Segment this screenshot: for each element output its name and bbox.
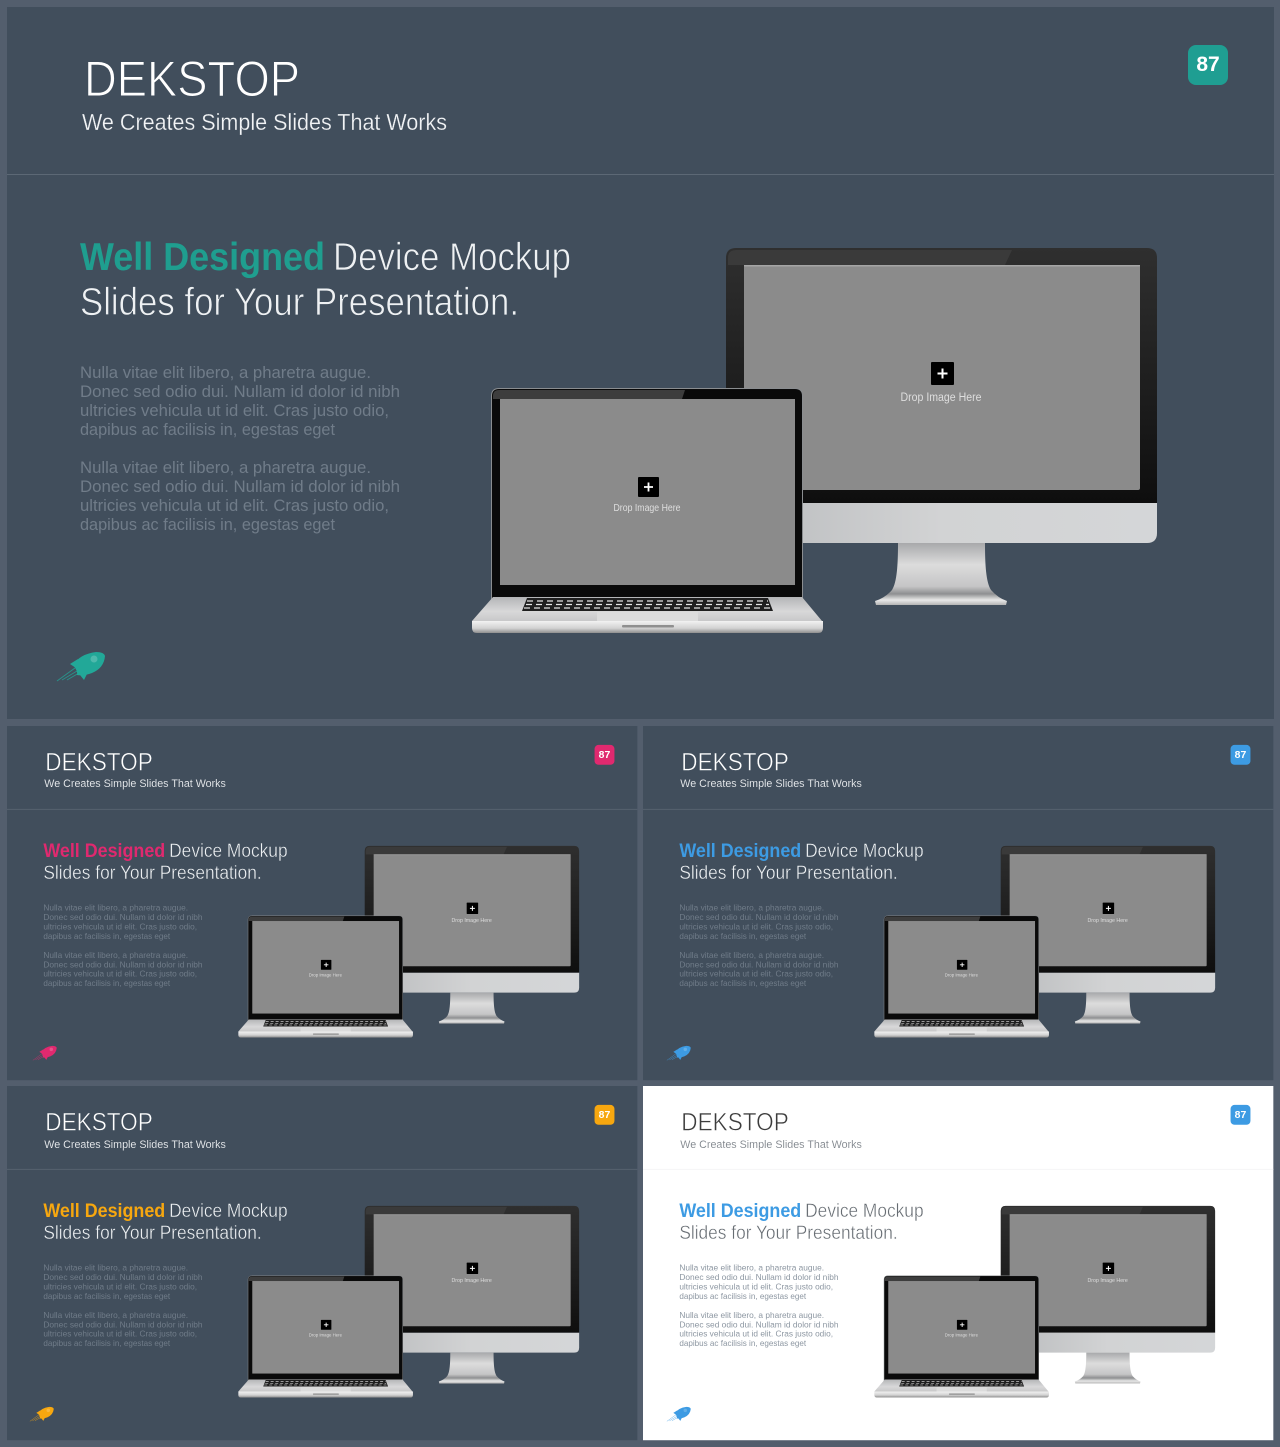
- heading: Well Designed: [679, 840, 801, 862]
- subtitle: We Creates Simple Slides That Works: [680, 1139, 862, 1151]
- body text: dapibus ac facilisis in, egestas eget: [43, 1338, 171, 1348]
- body text: dapibus ac facilisis in, egestas eget: [679, 1338, 807, 1348]
- page number badge: 87: [1235, 750, 1246, 761]
- monitor mockup: [365, 1206, 579, 1384]
- icon: rocket: [30, 1407, 54, 1421]
- heading: Well Designed: [43, 840, 165, 862]
- panel: pink slide: [7, 726, 637, 1080]
- body text: ultricies vehicula ut id elit. Cras justo odio,: [43, 921, 197, 931]
- body text: [43, 1263, 203, 1348]
- body text: dapibus ac facilisis in, egestas eget: [43, 1291, 171, 1301]
- body text: Nulla vitae elit libero, a pharetra augue.: [43, 1310, 188, 1320]
- heading: Slides for Your Presentation.: [43, 1222, 262, 1244]
- subtitle: We Creates Simple Slides That Works: [44, 778, 226, 790]
- page number badge: [595, 745, 614, 765]
- body text: Donec sed odio dui. Nullam id dolor id nibh: [679, 912, 839, 922]
- body text: Donec sed odio dui. Nullam id dolor id nibh: [679, 1272, 839, 1282]
- laptop mockup: Drop Image Here: [945, 1333, 978, 1339]
- body text: Nulla vitae elit libero, a pharetra augue.: [80, 458, 371, 477]
- monitor mockup: [1001, 846, 1215, 1024]
- body text: dapibus ac facilisis in, egestas eget: [43, 978, 171, 988]
- body text: [679, 1263, 839, 1348]
- body text: Donec sed odio dui. Nullam id dolor id nibh: [679, 959, 839, 969]
- page number badge: [1231, 745, 1250, 765]
- body text: ultricies vehicula ut id elit. Cras justo odio,: [80, 496, 389, 515]
- page number badge: 87: [1196, 53, 1220, 76]
- title: DEKSTOP: [681, 748, 789, 776]
- subtitle: We Creates Simple Slides That Works: [680, 778, 862, 790]
- heading: [679, 1200, 924, 1244]
- heading: Device Mockup: [333, 236, 571, 279]
- body text: ultricies vehicula ut id elit. Cras justo odio,: [679, 1281, 833, 1291]
- laptop mockup: [472, 388, 823, 633]
- monitor mockup: Drop Image Here: [452, 1278, 492, 1284]
- body text: Donec sed odio dui. Nullam id dolor id nibh: [43, 959, 203, 969]
- subtitle: We Creates Simple Slides That Works: [44, 1139, 226, 1151]
- subtitle: We Creates Simple Slides That Works: [82, 109, 447, 135]
- laptop mockup: Drop Image Here: [614, 503, 681, 514]
- body text: Nulla vitae elit libero, a pharetra augue.: [43, 903, 188, 913]
- body text: [43, 903, 203, 988]
- page number badge: 87: [1235, 1110, 1246, 1121]
- body text: ultricies vehicula ut id elit. Cras justo odio,: [80, 401, 389, 420]
- body text: ultricies vehicula ut id elit. Cras justo odio,: [43, 1281, 197, 1291]
- body text: dapibus ac facilisis in, egestas eget: [80, 515, 335, 534]
- body text: Nulla vitae elit libero, a pharetra augue.: [43, 1263, 188, 1273]
- heading: Device Mockup: [169, 840, 288, 862]
- body text: Nulla vitae elit libero, a pharetra augue.: [679, 903, 824, 913]
- icon: rocket: [667, 1407, 691, 1421]
- body text: Nulla vitae elit libero, a pharetra augue.: [679, 1263, 824, 1273]
- title: DEKSTOP: [45, 1108, 153, 1136]
- panel: main teal slide: [7, 7, 1274, 719]
- laptop mockup: [238, 916, 413, 1037]
- page number badge: [1231, 1105, 1250, 1125]
- body text: dapibus ac facilisis in, egestas eget: [679, 931, 807, 941]
- page number badge: [595, 1105, 614, 1125]
- icon: rocket: [667, 1046, 691, 1060]
- heading: Slides for Your Presentation.: [43, 862, 262, 884]
- heading: [43, 1200, 288, 1244]
- page number badge: 87: [599, 750, 610, 761]
- monitor mockup: Drop Image Here: [452, 918, 492, 924]
- body text: ultricies vehicula ut id elit. Cras justo odio,: [679, 921, 833, 931]
- icon: rocket: [57, 652, 105, 681]
- body text: ultricies vehicula ut id elit. Cras justo odio,: [43, 1329, 197, 1339]
- body text: ultricies vehicula ut id elit. Cras justo odio,: [679, 969, 833, 979]
- heading: [80, 236, 571, 324]
- page number badge: 87: [599, 1110, 610, 1121]
- panel: orange slide: [7, 1086, 637, 1440]
- body text: [679, 903, 839, 988]
- page number badge: [1188, 45, 1228, 85]
- laptop mockup: [874, 916, 1049, 1037]
- monitor mockup: Drop Image Here: [900, 392, 982, 404]
- body text: Donec sed odio dui. Nullam id dolor id nibh: [43, 1272, 203, 1282]
- body text: dapibus ac facilisis in, egestas eget: [679, 978, 807, 988]
- body text: Nulla vitae elit libero, a pharetra augue.: [43, 950, 188, 960]
- title: DEKSTOP: [84, 51, 300, 107]
- monitor mockup: [365, 846, 579, 1024]
- body text: Donec sed odio dui. Nullam id dolor id nibh: [43, 1319, 203, 1329]
- body text: dapibus ac facilisis in, egestas eget: [679, 1291, 807, 1301]
- body text: Donec sed odio dui. Nullam id dolor id nibh: [80, 382, 400, 401]
- monitor mockup: [1001, 1206, 1215, 1384]
- heading: Slides for Your Presentation.: [679, 862, 898, 884]
- title: DEKSTOP: [681, 1108, 789, 1136]
- heading: [679, 840, 924, 884]
- panel: blue slide: [643, 726, 1273, 1080]
- heading: Well Designed: [80, 236, 325, 279]
- heading: Slides for Your Presentation.: [80, 281, 519, 324]
- laptop mockup: Drop Image Here: [309, 973, 342, 979]
- laptop mockup: [874, 1276, 1049, 1397]
- body text: Nulla vitae elit libero, a pharetra augue.: [80, 363, 371, 382]
- monitor mockup: Drop Image Here: [1088, 1278, 1128, 1284]
- icon: rocket: [33, 1046, 57, 1060]
- laptop mockup: [238, 1276, 413, 1397]
- body text: Donec sed odio dui. Nullam id dolor id nibh: [80, 477, 400, 496]
- monitor mockup: [726, 248, 1157, 605]
- body text: ultricies vehicula ut id elit. Cras justo odio,: [679, 1329, 833, 1339]
- body text: [80, 363, 400, 534]
- body text: Nulla vitae elit libero, a pharetra augue.: [679, 1310, 824, 1320]
- heading: Well Designed: [43, 1200, 165, 1222]
- laptop mockup: Drop Image Here: [945, 973, 978, 979]
- heading: Well Designed: [679, 1200, 801, 1222]
- laptop mockup: Drop Image Here: [309, 1333, 342, 1339]
- heading: [43, 840, 288, 884]
- body text: Donec sed odio dui. Nullam id dolor id nibh: [679, 1319, 839, 1329]
- body text: Donec sed odio dui. Nullam id dolor id nibh: [43, 912, 203, 922]
- title: DEKSTOP: [45, 748, 153, 776]
- panel: white slide: [643, 1086, 1273, 1440]
- body text: dapibus ac facilisis in, egestas eget: [43, 931, 171, 941]
- heading: Slides for Your Presentation.: [679, 1222, 898, 1244]
- body text: dapibus ac facilisis in, egestas eget: [80, 420, 335, 439]
- heading: Device Mockup: [169, 1200, 288, 1222]
- body text: Nulla vitae elit libero, a pharetra augue.: [679, 950, 824, 960]
- heading: Device Mockup: [805, 1200, 924, 1222]
- body text: ultricies vehicula ut id elit. Cras justo odio,: [43, 969, 197, 979]
- heading: Device Mockup: [805, 840, 924, 862]
- monitor mockup: Drop Image Here: [1088, 918, 1128, 924]
